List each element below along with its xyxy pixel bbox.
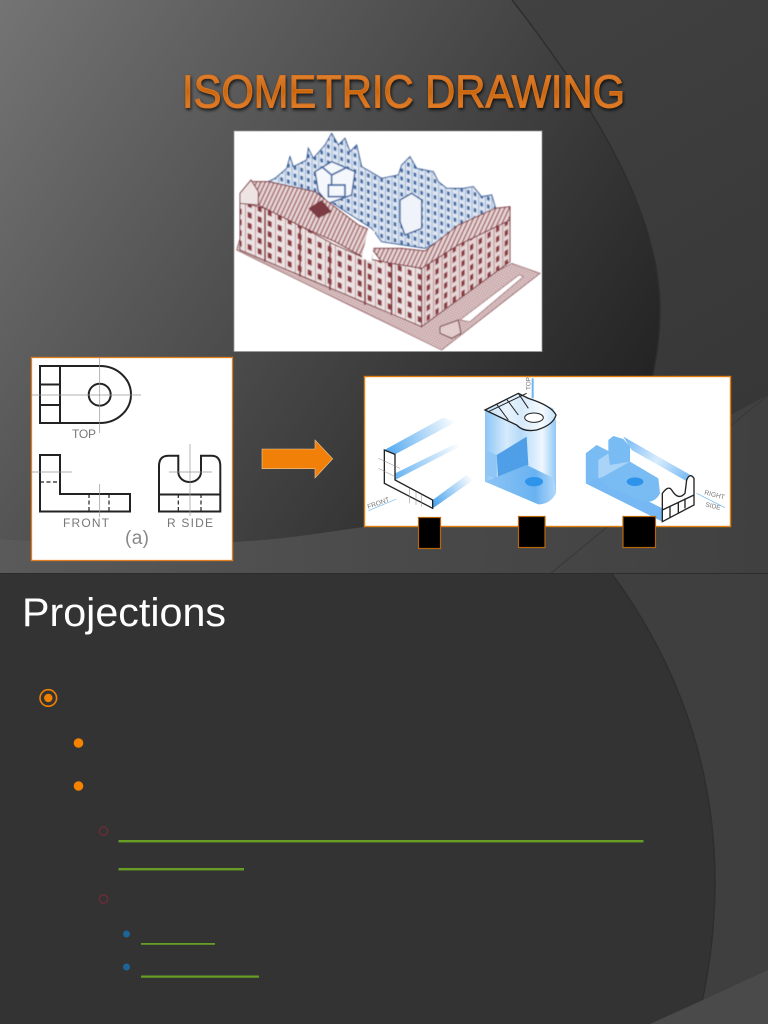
bullet list [40,690,644,978]
building paving [237,238,540,350]
slide 2 background [0,573,768,1024]
facade dividers [265,208,392,315]
level 2 bullet one [74,738,83,748]
rotunda [315,162,355,203]
heading: projections: Projections [22,591,226,635]
view caption: (a) [125,528,149,549]
blue rear buildings [268,133,497,248]
dark roof mass [308,200,332,218]
slide 1 background [0,0,768,574]
title: ISOMETRIC DRAWING [182,66,625,118]
top label: TOP [72,427,96,441]
link line two [118,868,244,870]
front view [32,455,130,517]
top label: TOP [525,377,532,390]
link line four [141,976,259,978]
level 2 bullet two [74,781,83,791]
redaction box 3 [623,516,656,548]
link line three [141,943,215,945]
redaction box 2 [518,516,545,548]
panel: isometric building illustration [234,131,542,352]
rotunda windows [322,167,348,197]
right facade [422,220,510,327]
level 3 bullet one [99,827,108,835]
right side label: R SIDE [167,516,213,530]
right side view [159,444,220,516]
redaction box 1 [418,518,440,548]
kiosk [440,320,461,338]
level 4 bullet one [123,930,130,938]
red right roof [372,207,510,272]
front label: FRONT [63,516,110,530]
level 3 bullet two [99,895,108,903]
level 1 bullet [40,690,57,706]
front view solid [367,418,473,511]
blue tower [400,193,422,235]
left facade [240,202,422,327]
link line one [118,840,644,842]
top view [32,357,141,433]
right side label: RIGHT [704,489,725,501]
level 4 bullet two [123,964,130,970]
top view solid [485,377,556,504]
right view solid: SIDE [705,501,722,512]
panel: isometric views [364,376,730,526]
panel: orthographic views [32,357,232,560]
right view solid [586,436,725,522]
red left roof [242,182,373,262]
front label: FRONT [367,496,391,511]
white courtyard strip [460,275,523,322]
arrow [262,440,333,478]
dome and corner tower [240,180,258,205]
light gable [362,228,375,262]
